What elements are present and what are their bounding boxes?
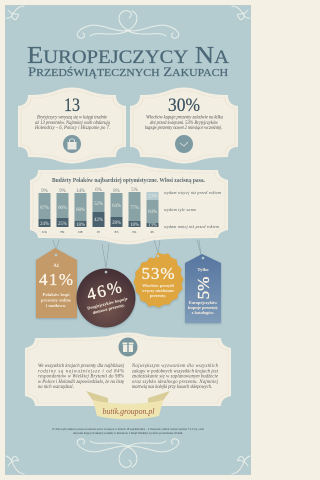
text: right column: oraz szybko idealnego prezentu. Najmniej	[132, 380, 219, 385]
tag: 5 percent: 5%	[194, 277, 213, 299]
chart legend: wydam mniej niż przed rokiem	[164, 224, 219, 229]
tag: 41 percent: prezenty online	[41, 298, 71, 302]
stacked bar chart: IT	[97, 230, 101, 234]
corner ornament bottom left	[6, 456, 24, 474]
chart legend	[164, 190, 221, 229]
stacked bar chart: PL	[151, 230, 154, 234]
stacked bar chart: 6%	[95, 188, 102, 193]
tag strings	[53, 240, 201, 268]
tag: 41 percent: Polaków kupi	[43, 292, 70, 297]
stacked bar chart: NL	[132, 230, 137, 234]
text: right column: Największym wyzwaniem dla wszystkich	[131, 364, 219, 369]
tag: 46 percent: Drogiejczyków kupuje	[87, 296, 128, 311]
chart legend: wydam więcej niż przed rokiem	[164, 190, 221, 195]
icon: gift	[118, 338, 138, 356]
text: left column: rodziny są najważniejsze i od 84%	[38, 369, 124, 374]
text: right column: zakupy w podobnych wszystkich krajach jest	[131, 369, 219, 374]
stacked bar chart: 64%	[148, 210, 157, 215]
stacked bar chart: 23%	[148, 194, 157, 200]
tag: 41 percent: 41%	[39, 270, 73, 289]
icon: clock	[175, 135, 193, 153]
panel: budget chart	[30, 163, 228, 244]
stacked bar chart: 25%	[58, 222, 67, 227]
tag: 5 percent: Europejczyków	[189, 300, 218, 305]
text: gifts description: Holendrzy – 6, Polacy i Hiszpanie po 7.	[34, 126, 110, 131]
tag: 46 percent: 46%	[85, 277, 123, 304]
stacked bar chart: FR	[60, 230, 65, 234]
footnote: W dniowym ankieta przeprowadzona przez Groupon w dniach 18 października – 2 listopada, udział wzięło łącznie 7/13 tys. osób	[52, 427, 204, 432]
stacked bar chart: 67%	[40, 206, 49, 211]
tag: 41 percent: Aż	[53, 264, 60, 269]
stacked bar chart: 77%	[130, 206, 139, 211]
stacked bar chart: 42%	[94, 218, 103, 223]
bottom ornament	[77, 439, 179, 467]
tag: 53 percent	[134, 253, 183, 307]
background panel	[5, 5, 251, 475]
stacked bar chart: 64%	[112, 204, 121, 209]
stacked bar chart: 28%	[112, 221, 121, 226]
corner ornament top left	[6, 6, 24, 20]
stacked bar chart: 5%	[131, 188, 138, 193]
tag: 5 percent: Tylko	[197, 267, 209, 272]
tag: 53 percent: prezenty.	[150, 293, 166, 298]
ribbon: butik.groupon.pl: butik.groupon.pl	[102, 406, 155, 416]
tag: 5 percent: z katalogów.	[192, 310, 214, 315]
text: left column: We wszystkich krajach prezenty dla najbliższej	[38, 364, 125, 369]
title: EUROPEJCZYCY NA	[27, 43, 230, 69]
text: left column: na nich oszczędzać.	[38, 385, 74, 390]
footnote	[52, 427, 204, 436]
stacked bar chart: UK	[42, 230, 47, 234]
stacked bar chart	[38, 188, 158, 234]
corner ornament top right	[232, 6, 250, 20]
stacked bar chart: 24%	[40, 222, 49, 227]
panel: 30 percent	[130, 88, 238, 164]
panel: summary	[25, 332, 231, 406]
stacked bar chart: 13%	[148, 224, 157, 228]
text: left column	[38, 364, 125, 390]
text: right column: znaleziskanie się w zaplanowanym budżecie	[131, 375, 218, 380]
tag: 41 percent	[36, 248, 77, 318]
text: timing description: dni przed świętami. 53% Brytyjczyków	[150, 121, 219, 126]
stat: 30%: 30%	[168, 95, 200, 116]
tag: 53 percent: 53%	[142, 264, 174, 283]
stacked bar chart: DE	[78, 230, 83, 234]
text: timing description: kupuje prezenty nawet 2 miesiące wcześniej.	[145, 126, 222, 131]
text: right column: martwią nas kolejki przy kasach sklepowych.	[132, 385, 212, 390]
text: gifts description	[34, 116, 111, 131]
panel: 13 gifts	[18, 88, 126, 164]
stacked bar chart: 66%	[58, 206, 67, 211]
tag: 53 percent: Włochów pomyśli	[142, 283, 175, 288]
text: gifts description: Brytyjczycy wmyszą się w księgi trudnie	[37, 116, 107, 120]
corner ornament bottom right	[232, 456, 250, 474]
tag: 5 percent: kupuje prezenty	[188, 305, 219, 310]
text: timing description	[145, 116, 224, 131]
tag: 41 percent: i mailowo.	[46, 303, 66, 308]
chart title: Budżety Polaków najbardziej optymistyczne. Włosi zacisną pasa.	[52, 178, 206, 184]
stacked bar chart: 8%	[113, 189, 120, 194]
tag: 46 percent: domowe prezenty.	[92, 302, 125, 315]
stacked bar chart: 52%	[94, 202, 103, 207]
tag: 5 percent	[185, 254, 221, 323]
stacked bar chart: 18%	[76, 223, 85, 228]
stacked bar chart: 9%	[41, 189, 48, 194]
text: gifts description: aż 13 prezentów. Najmniej osób obdarują	[35, 121, 111, 126]
chart legend: wydam tyle samo	[164, 207, 196, 212]
title: PRZEDŚWIĄTECZNYCH ZAKUPACH	[28, 64, 228, 79]
stacked bar chart: 68%	[76, 208, 85, 213]
tag: 46 percent	[76, 268, 136, 328]
text: right column	[131, 364, 219, 390]
stacked bar chart: 18%	[130, 223, 139, 228]
tag: 53 percent: wręczy niezłożone	[142, 288, 174, 293]
stacked bar chart: 9%	[59, 189, 66, 194]
ribbon: butik.groupon.pl	[86, 391, 170, 420]
text: left column: respondentów w Wielkiej Brytanii do 98%	[38, 375, 124, 380]
text: timing description: Włochów kupuje prezenty zaledwie na kilka	[146, 116, 224, 120]
stat: 13: 13	[64, 95, 80, 116]
top ornament	[77, 11, 179, 38]
stacked bar chart: 14%	[76, 189, 85, 194]
icon: shopping bag	[63, 135, 81, 153]
footnote: aktywnie mających usługi i produkty w Internecie, z Danji Wielkiej i tej oferta pochodzenie z Polski.	[73, 431, 183, 436]
stacked bar chart: ES	[115, 230, 119, 234]
text: left column: w Polsce i Holandii zapowiedziało, że na listę	[38, 380, 124, 385]
